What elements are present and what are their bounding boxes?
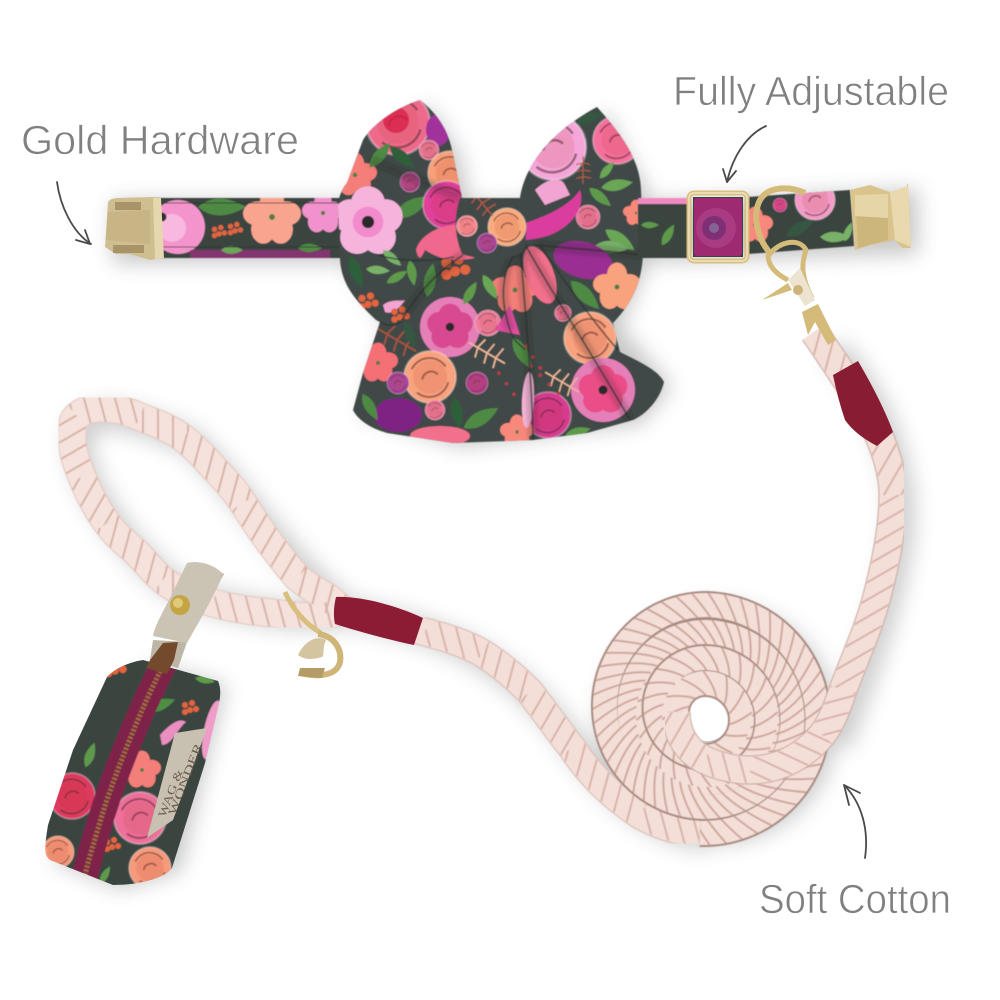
square gold slider with rose	[689, 193, 747, 261]
D-ring and leash clasp	[756, 188, 836, 345]
gold buckle, left	[105, 197, 164, 260]
wine rope wrap, upper right	[833, 361, 893, 446]
gold side-release buckle, right	[850, 183, 911, 250]
pouch zipper	[84, 664, 164, 880]
pouch floral body	[45, 660, 220, 885]
pouch brand label: WAG &	[157, 768, 186, 819]
coiled rope spiral	[590, 590, 828, 848]
sailor bow	[330, 91, 670, 450]
rope strand leaving coil and rising to collar	[676, 332, 893, 770]
wine rope wrap, lower left	[334, 597, 423, 645]
arrow to slider	[723, 126, 766, 182]
back of leather strap behind rope	[196, 566, 224, 602]
soft drop shadows	[53, 104, 918, 889]
label: Fully Adjustable: Fully Adjustable	[673, 68, 949, 114]
pouch brand label	[147, 728, 207, 838]
leash handle loop rope	[72, 408, 340, 617]
bow right wing flowers	[528, 112, 640, 310]
label: Gold Hardware: Gold Hardware	[21, 117, 299, 163]
poop bag pouch	[40, 562, 230, 890]
zipper pull	[146, 642, 178, 674]
label: Soft Cotton: Soft Cotton	[759, 876, 951, 922]
collar right strip	[637, 189, 854, 259]
pouch brand label: WONDER	[167, 741, 205, 817]
bow left wing flowers	[337, 100, 462, 314]
arrow to gold buckle	[57, 182, 91, 244]
pouch leather strap	[150, 562, 223, 668]
bow center petals and fold creases	[370, 160, 642, 440]
gold ring and charm on leash	[285, 592, 340, 678]
bow tail flowers	[358, 242, 635, 448]
arrow to rope coil	[844, 785, 866, 858]
leash middle run rope	[410, 628, 700, 833]
collar left strip	[156, 197, 341, 259]
white hole in coil centre	[683, 693, 731, 741]
bow knot	[455, 197, 528, 258]
